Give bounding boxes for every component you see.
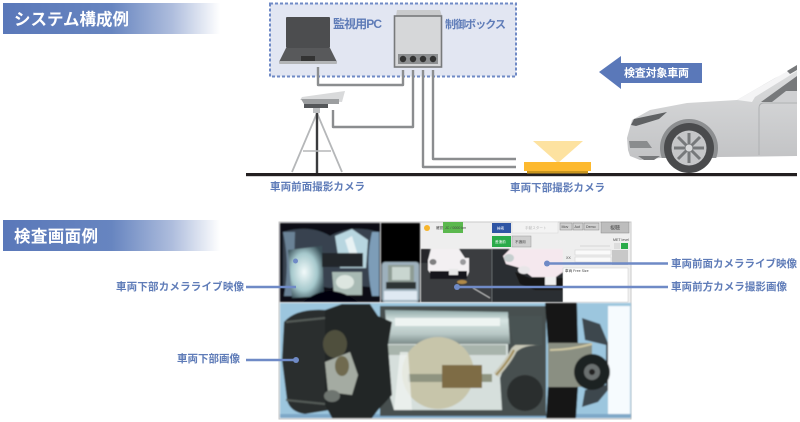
heading: system configuration: システム構成例 bbox=[14, 9, 129, 29]
live under-vehicle camera image bbox=[280, 223, 380, 302]
control panel: Aut bbox=[574, 225, 580, 229]
front live camera image bbox=[492, 249, 563, 302]
cables bbox=[318, 67, 516, 167]
ground line bbox=[246, 173, 797, 176]
result side panel bbox=[563, 249, 631, 302]
panel: monitoring area bbox=[270, 4, 516, 76]
heading: system configuration bbox=[3, 3, 220, 34]
control panel: 手動スタート bbox=[525, 225, 547, 230]
label: front live camera: 車両前面カメラライブ映像 bbox=[671, 257, 798, 270]
icon: control box bbox=[394, 10, 442, 67]
label: under-vehicle camera: 車両下部撮影カメラ bbox=[510, 181, 605, 194]
icon: under-vehicle camera bbox=[524, 141, 591, 174]
control panel: 差遣前 bbox=[495, 239, 506, 244]
under-vehicle image bbox=[280, 303, 631, 418]
label: front camera: 車両前面撮影カメラ bbox=[270, 180, 365, 193]
screenshot: inspection screen bbox=[279, 222, 631, 419]
control panel: Demo bbox=[586, 225, 596, 229]
leader: under-vehicle live camera bbox=[246, 258, 298, 287]
label: control box: 制御ボックス bbox=[445, 17, 506, 31]
leader: front live camera bbox=[544, 260, 668, 266]
result side panel: XX bbox=[566, 256, 571, 260]
control panel: 検索 bbox=[497, 226, 505, 230]
front camera image bbox=[421, 249, 492, 302]
icon: front camera on tripod bbox=[292, 91, 345, 173]
heading: inspection screen bbox=[3, 220, 220, 251]
icon: car bbox=[627, 65, 797, 177]
label: under-vehicle live camera: 車両下部カメラライブ映像 bbox=[116, 280, 244, 293]
arrow: inspected vehicle: 検査対象車両 bbox=[624, 66, 689, 80]
leader: under-vehicle image bbox=[246, 357, 299, 363]
control panel: JC / 0000 km bbox=[445, 226, 466, 230]
control panel: Mov bbox=[562, 225, 568, 229]
control panel bbox=[421, 222, 630, 250]
arrow: inspected vehicle bbox=[599, 56, 702, 89]
label: monitoring PC: 監視用PC bbox=[333, 16, 382, 31]
result side panel: 車両 Free Size bbox=[565, 268, 589, 273]
label: front camera image: 車両前方カメラ撮影画像 bbox=[671, 280, 788, 293]
control panel: 不適用 bbox=[515, 239, 526, 244]
icon: laptop bbox=[279, 17, 337, 64]
rear camera image bbox=[381, 223, 420, 302]
control panel: 確認 bbox=[436, 225, 444, 230]
leader: front camera image bbox=[454, 284, 668, 290]
label: under-vehicle image: 車両下部画像 bbox=[177, 352, 240, 365]
control panel: 視聴 bbox=[610, 224, 620, 232]
control panel: MET level bbox=[613, 238, 629, 242]
heading: inspection screen: 検査画面例 bbox=[14, 227, 98, 246]
